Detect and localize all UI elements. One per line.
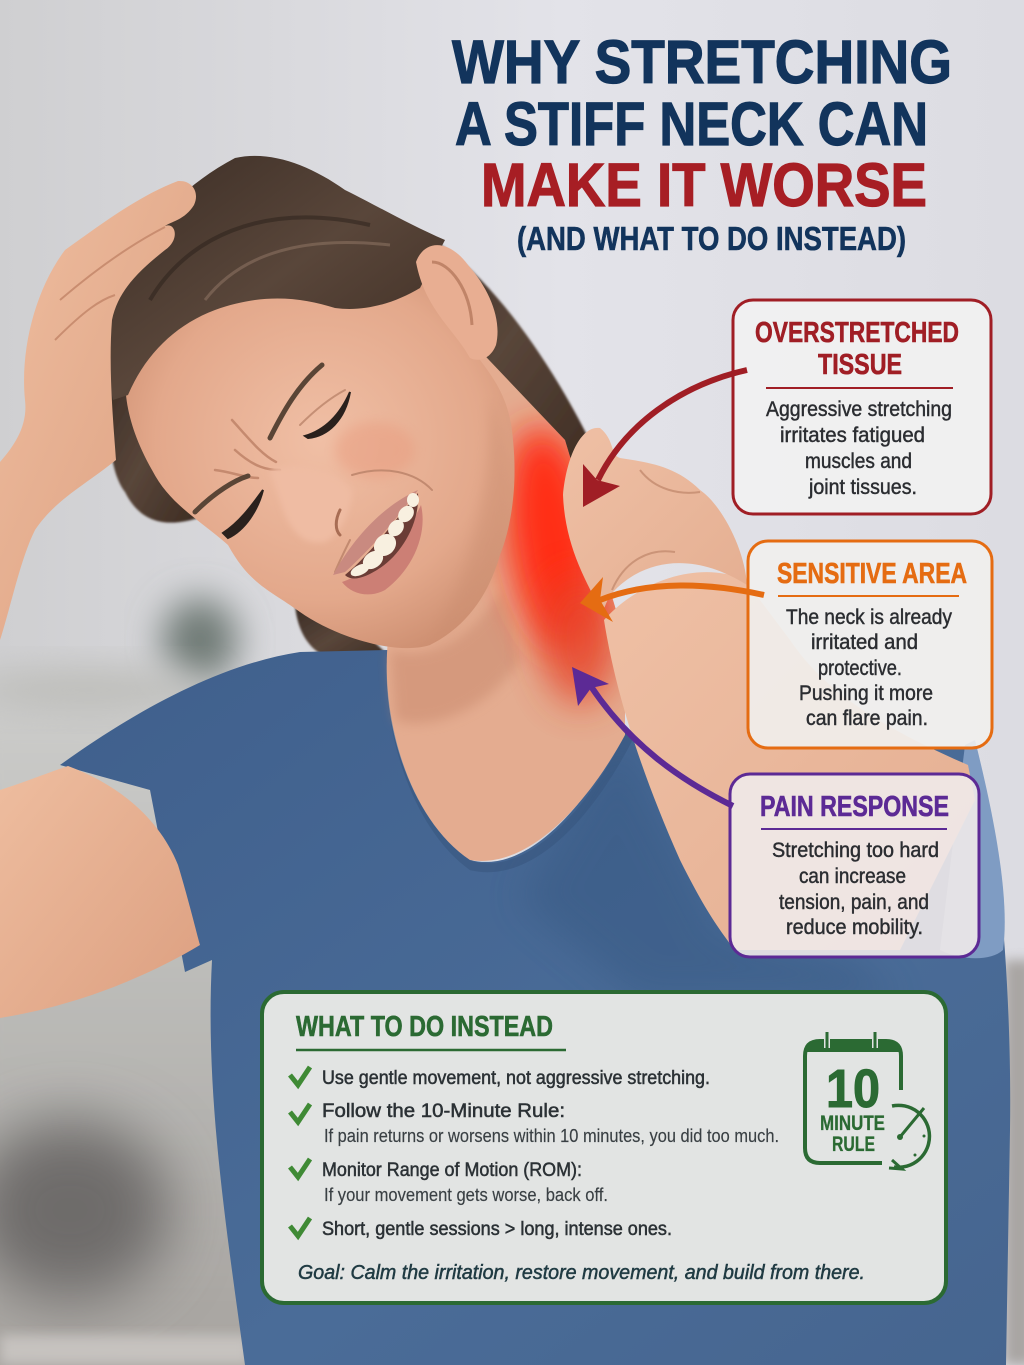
face: [126, 270, 515, 648]
hair front: [107, 156, 445, 400]
panel: sensitive area: The neck is already: [786, 606, 952, 629]
shirt collar band: [391, 652, 630, 868]
panel: overstretched tissue: muscles and: [805, 450, 912, 473]
panel: what to do instead: [262, 992, 946, 1303]
panel: overstretched tissue: Aggressive stretching: [766, 398, 952, 421]
panel: pain response: Stretching too hard: [772, 839, 939, 862]
panel: pain response: reduce mobility.: [786, 916, 923, 939]
panel: overstretched tissue: OVERSTRETCHED: [755, 317, 959, 349]
cheek flush: [335, 422, 415, 478]
panel: sensitive area: Pushing it more: [799, 682, 933, 705]
hand on neck: [563, 428, 747, 612]
panel: sensitive area: protective.: [818, 657, 902, 680]
title: WHY STRETCHING: [452, 28, 952, 96]
ear: [416, 245, 498, 360]
eye upper lid: [300, 390, 345, 425]
panel: pain response: [730, 774, 979, 957]
chest shadow below the jaw: [390, 590, 520, 723]
checklist: Short, gentle sessions > long, intense ones.: [322, 1219, 672, 1240]
eye lower lashes: [223, 490, 263, 538]
goal statement: Goal: Calm the irritation, restore movement, and build from there.: [298, 1262, 865, 1284]
panel: overstretched tissue: [733, 300, 991, 514]
panel: pain response: PAIN RESPONSE: [760, 791, 949, 823]
face shading on jaw: [430, 400, 509, 645]
panel: sensitive area: SENSITIVE AREA: [777, 558, 967, 590]
neck and chest: [387, 340, 625, 861]
teeth: [349, 493, 419, 579]
red pain glow on the neck: [491, 420, 618, 705]
arrow: pain response to neck: [572, 667, 733, 806]
mouth interior: [345, 493, 418, 579]
raised hand holding head: [0, 181, 196, 640]
panel: overstretched tissue: irritates fatigued: [780, 424, 925, 447]
eyebrow lower: [195, 476, 248, 512]
right forearm raised to neck: [604, 572, 975, 950]
title: (AND WHAT TO DO INSTEAD): [517, 220, 906, 257]
checklist: If pain returns or worsens within 10 minutes, you did too much.: [324, 1126, 779, 1146]
panel: pain response: can increase: [799, 865, 906, 888]
shirt sleeve lower shade: [520, 735, 900, 1000]
shirt sleeve highlight on right: [940, 740, 1005, 958]
arrow: overstretched to neck: [583, 370, 747, 507]
checklist: Use gentle movement, not aggressive stretching.: [322, 1068, 710, 1089]
title: [452, 28, 952, 257]
icon: 10 minute rule calendar with stopwatch: RULE: [832, 1133, 875, 1156]
icon: 10 minute rule calendar with stopwatch: 10: [826, 1059, 880, 1119]
icon: 10 minute rule calendar with stopwatch: MINUTE: [820, 1112, 885, 1135]
checklist: [290, 1067, 779, 1240]
panel: sensitive area: [748, 541, 992, 748]
lower lip: [342, 505, 423, 594]
checklist: If your movement gets worse, back off.: [324, 1185, 608, 1205]
left arm lower: [0, 766, 200, 1018]
facial features: [195, 365, 432, 594]
panel: overstretched tissue: TISSUE: [818, 349, 902, 381]
checklist: Follow the 10-Minute Rule:: [322, 1101, 565, 1122]
upper lip: [333, 490, 418, 575]
nose: [270, 466, 352, 543]
title: A STIFF NECK CAN: [455, 90, 928, 158]
panel: sensitive area: irritated and: [811, 631, 918, 654]
checklist: Monitor Range of Motion (ROM):: [322, 1160, 582, 1181]
heading: WHAT TO DO INSTEAD: [296, 1011, 553, 1043]
shirt: [60, 650, 1010, 1365]
arrow: sensitive area to neck: [580, 577, 764, 622]
icon: 10 minute rule calendar with stopwatch: [805, 1032, 929, 1169]
panel: overstretched tissue: joint tissues.: [808, 476, 917, 499]
hair behind the head: [109, 225, 592, 662]
forehead creases: [215, 420, 280, 478]
panel: pain response: tension, pain, and: [779, 891, 929, 914]
panel: sensitive area: can flare pain.: [806, 707, 928, 730]
eyebrow upper: [270, 365, 322, 438]
title: MAKE IT WORSE: [481, 151, 927, 219]
eye upper lashes: [305, 392, 350, 438]
